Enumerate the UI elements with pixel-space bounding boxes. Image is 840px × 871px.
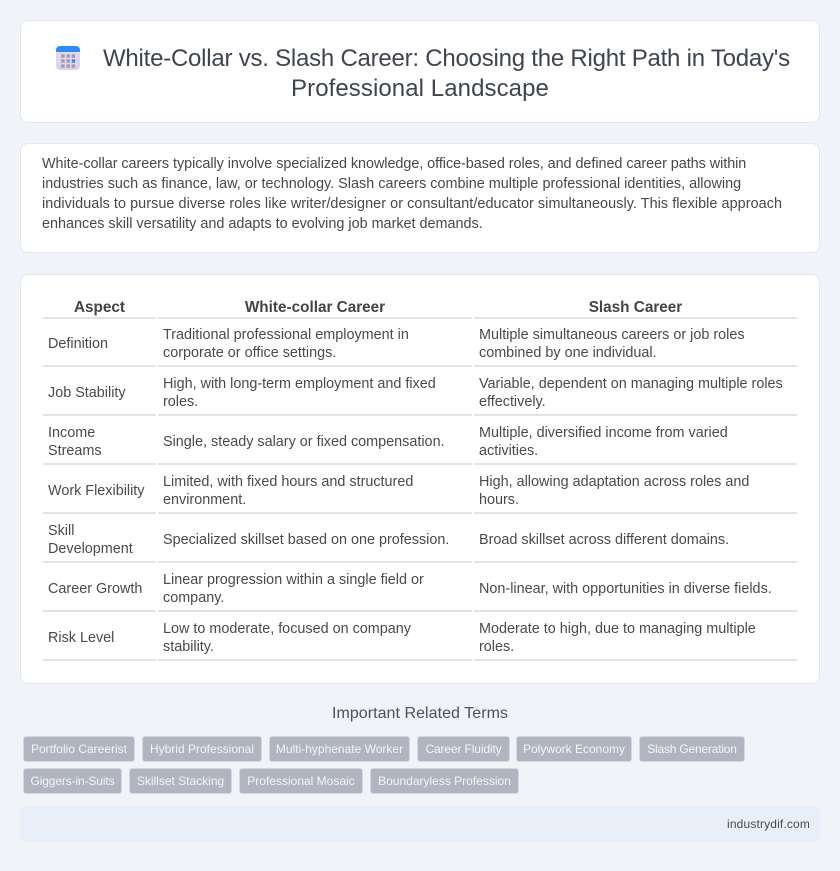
table row: Definition: Traditional professional employment in bbox=[163, 327, 409, 343]
table row: Skill Development bbox=[43, 523, 797, 563]
table row: Income Streams: Streams bbox=[48, 443, 102, 459]
table row: Income Streams: Income bbox=[48, 425, 95, 441]
table row: Definition bbox=[43, 327, 797, 367]
table row: Income Streams: activities. bbox=[479, 443, 538, 459]
table header: Aspect bbox=[74, 299, 125, 316]
table row: Work Flexibility: Work Flexibility bbox=[48, 483, 144, 499]
title: White-Collar vs. Slash Career: Choosing the Right Path in Today's bbox=[103, 45, 790, 72]
table row: Career Growth: Career Growth bbox=[48, 581, 142, 597]
table row: Definition: Multiple simultaneous careers or job roles bbox=[479, 327, 745, 343]
table row: Skill Development: Broad skillset across different domains. bbox=[479, 532, 729, 548]
table row: Job Stability: effectively. bbox=[479, 394, 546, 410]
table row: Job Stability: High, with long-term employment and fixed bbox=[163, 376, 436, 392]
table header bbox=[43, 299, 797, 319]
table row: Risk Level: stability. bbox=[163, 639, 214, 655]
related term tags: Slash Generation bbox=[647, 742, 737, 756]
table row: Skill Development: Skill bbox=[48, 523, 74, 539]
related term tags: Polywork Economy bbox=[523, 742, 625, 756]
intro text: industries such as finance, law, or technology. Slash careers combine multiple professional identities, allowing bbox=[42, 176, 741, 192]
intro text: White-collar careers typically involve specialized knowledge, office-based roles, and defined career paths within bbox=[42, 156, 746, 172]
table header: White-collar Career bbox=[245, 299, 385, 316]
table row: Income Streams: Single, steady salary or fixed compensation. bbox=[163, 434, 445, 450]
intro text: individuals to pursue diverse roles like writer/designer or consultant/educator simultaneously. This flexible approach bbox=[42, 196, 782, 212]
panel: introduction bbox=[20, 143, 820, 253]
icon: calendar bbox=[56, 46, 80, 70]
title bbox=[103, 45, 790, 102]
table row: Skill Development: Specialized skillset based on one profession. bbox=[163, 532, 449, 548]
table row: Career Growth bbox=[43, 572, 797, 612]
table row: Work Flexibility: High, allowing adaptation across roles and bbox=[479, 474, 749, 490]
table row: Career Growth: Linear progression within a single field or bbox=[163, 572, 424, 588]
table row: Work Flexibility: Limited, with fixed hours and structured bbox=[163, 474, 413, 490]
related term tags: Portfolio Careerist bbox=[31, 742, 127, 756]
related term tags: Career Fluidity bbox=[425, 742, 502, 756]
table row: Income Streams: Multiple, diversified income from varied bbox=[479, 425, 728, 441]
intro text: enhances skill versatility and adapts to evolving job market demands. bbox=[42, 216, 483, 232]
table row: Risk Level: Risk Level bbox=[48, 630, 114, 646]
table row: Work Flexibility: environment. bbox=[163, 492, 246, 508]
table row: Definition: combined by one individual. bbox=[479, 345, 657, 361]
related term tags bbox=[23, 736, 745, 794]
table row: Definition: Definition bbox=[48, 336, 108, 352]
table row: Income Streams bbox=[43, 425, 797, 465]
footer source: industrydif.com bbox=[727, 817, 810, 831]
related term tags: Multi-hyphenate Worker bbox=[276, 742, 403, 756]
table row: Risk Level bbox=[43, 621, 797, 661]
related term tags: Giggers-in-Suits bbox=[31, 774, 114, 788]
table row: Job Stability: roles. bbox=[163, 394, 198, 410]
panel: comparison table bbox=[20, 274, 820, 684]
table row: Skill Development: Development bbox=[48, 541, 133, 557]
related term tags: Hybrid Professional bbox=[150, 742, 254, 756]
footer bar bbox=[20, 807, 820, 841]
table row: Risk Level: Low to moderate, focused on company bbox=[163, 621, 411, 637]
heading: related terms: Important Related Terms bbox=[332, 705, 508, 722]
table row: Risk Level: Moderate to high, due to managing multiple bbox=[479, 621, 756, 637]
related term tags: Professional Mosaic bbox=[247, 774, 355, 788]
table header: Slash Career bbox=[589, 299, 682, 316]
table row: Career Growth: Non-linear, with opportunities in diverse fields. bbox=[479, 581, 772, 597]
table row: Career Growth: company. bbox=[163, 590, 224, 606]
related term tags: Boundaryless Profession bbox=[378, 774, 511, 788]
table row: Job Stability: Variable, dependent on managing multiple roles bbox=[479, 376, 783, 392]
table row: Risk Level: roles. bbox=[479, 639, 514, 655]
table row: Job Stability bbox=[43, 376, 797, 416]
table row: Definition: corporate or office settings. bbox=[163, 345, 336, 361]
table row: Work Flexibility: hours. bbox=[479, 492, 519, 508]
title: Professional Landscape bbox=[291, 75, 549, 102]
panel: header bbox=[20, 20, 820, 123]
table row: Job Stability: Job Stability bbox=[48, 385, 126, 401]
related term tags: Skillset Stacking bbox=[137, 774, 224, 788]
table row: Work Flexibility bbox=[43, 474, 797, 514]
intro text bbox=[42, 156, 782, 232]
